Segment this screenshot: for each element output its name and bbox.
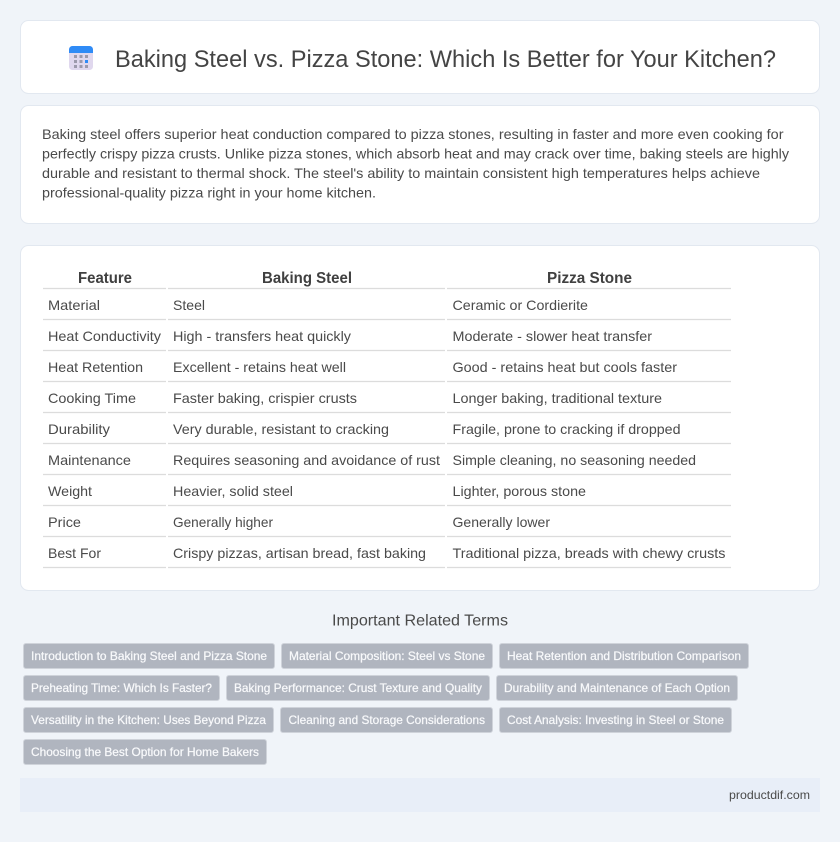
tag: Material Composition: Steel vs Stone (289, 649, 485, 663)
row: best for: Traditional pizza, breads with chewy crusts (452, 545, 726, 561)
table header: Feature (78, 270, 132, 287)
intro text: professional-quality pizza right in your home kitchen. (42, 184, 376, 200)
row: heat conductivity: High - transfers heat quickly (173, 328, 351, 344)
tag (496, 676, 738, 700)
row: cooking time: Longer baking, traditional texture (452, 390, 662, 406)
tag: Durability and Maintenance of Each Option (504, 681, 730, 695)
tag: Heat Retention and Distribution Comparison (507, 649, 741, 663)
intro paragraph card (20, 106, 820, 224)
table header: Pizza Stone (547, 270, 632, 287)
intro text: Baking steel offers superior heat conduction compared to pizza stones, resulting in faster and more even cooking for (42, 126, 784, 142)
row: best for: Crispy pizzas, artisan bread, fast baking (173, 545, 426, 561)
row: price: Price (48, 514, 81, 530)
tag (500, 644, 748, 668)
row: cooking time: Faster baking, crispier crusts (173, 390, 357, 406)
tag: Baking Performance: Crust Texture and Quality (234, 681, 482, 695)
row: price: Generally higher (173, 514, 273, 530)
row: material: Material (48, 297, 100, 313)
related terms heading: Important Related Terms (332, 612, 508, 630)
row: heat retention: Excellent - retains heat well (173, 359, 346, 375)
row: heat conductivity: Heat Conductivity (48, 328, 161, 344)
row: weight (48, 483, 586, 499)
tag: Cost Analysis: Investing in Steel or Stone (507, 713, 724, 727)
tag: Introduction to Baking Steel and Pizza Stone (31, 649, 267, 663)
related term tags (24, 644, 748, 764)
row: heat conductivity (48, 328, 652, 344)
tag (24, 740, 266, 764)
row: price (48, 514, 550, 530)
tag (280, 708, 492, 732)
row: durability: Fragile, prone to cracking if dropped (452, 421, 680, 437)
row: heat retention: Good - retains heat but cools faster (452, 359, 677, 375)
intro text: durable and resistant to thermal shock. The steel's ability to maintain consistent high temperatures helps achieve (42, 165, 760, 181)
intro text: perfectly crispy pizza crusts. Unlike pizza stones, which absorb heat and may crack over time, baking steels are highly (42, 146, 789, 162)
row: cooking time: Cooking Time (48, 390, 136, 406)
tag (24, 676, 220, 700)
row: price: Generally lower (452, 514, 550, 530)
row: heat retention (48, 359, 677, 375)
row: maintenance (48, 452, 696, 468)
row: material (48, 297, 588, 313)
icon: calendar (69, 46, 93, 70)
row: best for: Best For (48, 545, 101, 561)
row: weight: Heavier, solid steel (173, 483, 293, 499)
tag (24, 644, 274, 668)
intro text (42, 126, 789, 200)
tag (226, 676, 490, 700)
row: durability: Durability (48, 421, 110, 437)
row: best for (48, 545, 726, 561)
footer source text: productdif.com (729, 788, 810, 802)
row: maintenance: Maintenance (48, 452, 131, 468)
row: weight: Lighter, porous stone (452, 483, 586, 499)
table header (78, 270, 632, 287)
comparison table card (20, 246, 820, 590)
table header: Baking Steel (262, 270, 352, 287)
row: maintenance: Simple cleaning, no seasoning needed (452, 452, 696, 468)
row: heat retention: Heat Retention (48, 359, 143, 375)
tag: Choosing the Best Option for Home Bakers (31, 745, 259, 759)
row: cooking time (48, 390, 662, 406)
row: material: Ceramic or Cordierite (452, 297, 588, 313)
title: Baking Steel vs. Pizza Stone: Which Is Better for Your Kitchen? (115, 46, 776, 73)
header card (20, 20, 820, 94)
row: maintenance: Requires seasoning and avoidance of rust (173, 452, 440, 468)
tag (24, 708, 274, 732)
tag: Versatility in the Kitchen: Uses Beyond Pizza (31, 713, 266, 727)
tag (282, 644, 492, 668)
row: weight: Weight (48, 483, 92, 499)
footer bar (20, 778, 820, 812)
tag: Preheating Time: Which Is Faster? (31, 681, 212, 695)
tag: Cleaning and Storage Considerations (288, 713, 485, 727)
row: heat conductivity: Moderate - slower heat transfer (452, 328, 652, 344)
row: durability: Very durable, resistant to cracking (173, 421, 389, 437)
tag (500, 708, 732, 732)
row: durability (48, 421, 680, 437)
row: material: Steel (173, 297, 205, 313)
